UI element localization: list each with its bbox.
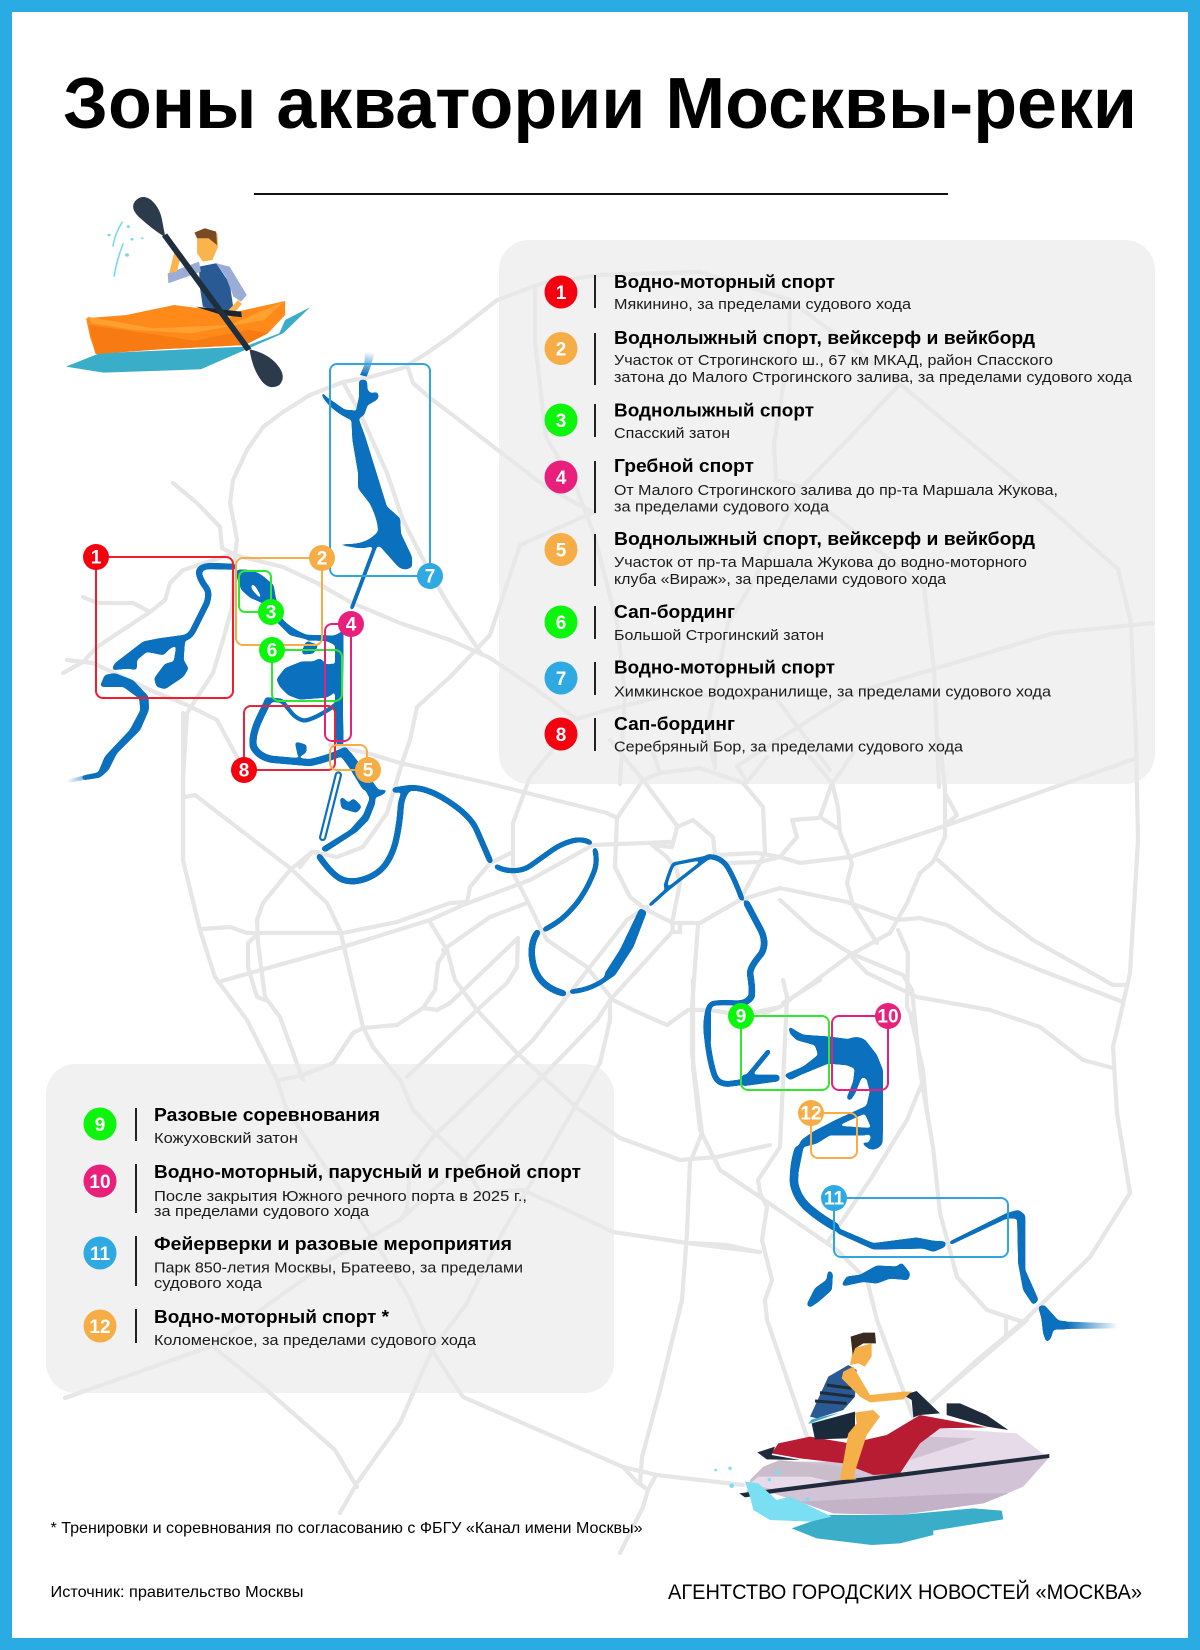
legend item 7: Химкинское водохранилище, за пределами судового хода xyxy=(614,684,1052,700)
legend item 2: затона до Малого Строгинского залива, за пределами судового хода xyxy=(614,369,1133,386)
southern lakes xyxy=(807,1270,833,1307)
bay fragment xyxy=(302,642,318,654)
map badges: 12 xyxy=(800,1104,822,1124)
map badges: 1 xyxy=(91,548,102,568)
river: tail fades xyxy=(67,352,1118,1329)
Serebryany Bor channels xyxy=(253,701,345,763)
legend item 8: Серебряный Бор, за пределами судового хода xyxy=(614,738,964,756)
legend item 4: От Малого Строгинского залива до пр-та Маршала Жукова, xyxy=(614,482,1058,499)
legend item 2: 2 xyxy=(556,340,566,360)
legend item 6: 6 xyxy=(556,613,566,634)
legend item 12: 12 xyxy=(89,1317,111,1338)
legend item 6 xyxy=(544,602,824,644)
legend item 2 xyxy=(544,328,1133,386)
map badges: 5 xyxy=(363,760,374,782)
legend item 4: за пределами судового хода xyxy=(614,498,830,516)
legend item 7: 7 xyxy=(556,669,566,690)
main channel segments xyxy=(395,788,490,861)
title: Зоны акватории Москвы-реки xyxy=(63,64,1137,144)
legend item 1: Водно-моторный спорт xyxy=(614,272,835,292)
legend item 3: Спасский затон xyxy=(614,425,730,442)
legend item 2: Воднолыжный спорт, вейксерф и вейкборд xyxy=(614,328,1036,348)
Khimki reservoir xyxy=(322,380,412,569)
legend item 5: Воднолыжный спорт, вейксерф и вейкборд xyxy=(614,529,1036,549)
canal xyxy=(352,547,375,608)
legend item 2: Участок от Строгинского ш., 67 км МКАД, район Спасского xyxy=(614,352,1053,369)
Spasskiy backwater xyxy=(237,570,340,642)
legend item 11 xyxy=(84,1234,523,1292)
map badges: 8 xyxy=(239,760,249,782)
legend item 7: Водно-моторный спорт xyxy=(614,658,835,678)
legend item 10: После закрытия Южного речного порта в 2025 г., xyxy=(154,1188,527,1205)
map badges: 2 xyxy=(317,548,327,570)
Kolomenskoye arm xyxy=(793,1106,872,1180)
isolated rowing canal xyxy=(323,775,338,837)
legend item 10 xyxy=(84,1162,581,1220)
map badges: 6 xyxy=(267,640,277,662)
legend item 11: Фейерверки и разовые мероприятия xyxy=(154,1234,512,1254)
legend item 8 xyxy=(544,714,964,756)
legend: zones 9–12 xyxy=(84,1105,581,1349)
map badges: 9 xyxy=(736,1006,746,1028)
map badges: 4 xyxy=(346,614,357,636)
Myakinino lower channel xyxy=(82,673,149,780)
canal to Serebryany Bor xyxy=(325,630,343,745)
main bend below zone 5 xyxy=(321,752,388,852)
legend item 5: Участок от пр-та Маршала Жукова до водно-моторного xyxy=(614,554,1027,571)
legend item 1 xyxy=(544,272,912,313)
legend item 12: Водно-моторный спорт * xyxy=(154,1307,389,1327)
legend item 9 xyxy=(84,1105,380,1147)
panel background: zones 1–8 xyxy=(499,240,1155,784)
Southern port basin xyxy=(784,1026,883,1149)
pond xyxy=(340,797,362,813)
legend item 11: 11 xyxy=(90,1244,110,1265)
legend item 11: Парк 850-летия Москвы, Братеево, за пределами xyxy=(154,1260,523,1276)
road network xyxy=(63,272,1153,1553)
panel background: zones 9–12 xyxy=(46,1064,614,1393)
source: Источник: правительство Москвы xyxy=(50,1584,304,1601)
legend item 7 xyxy=(544,658,1052,700)
legend item 11: судового хода xyxy=(154,1275,263,1292)
Kozhukhovo channel xyxy=(706,1010,745,1084)
title rule xyxy=(254,193,948,195)
legend item 8: Сап-бординг xyxy=(614,714,736,734)
legend item 8: 8 xyxy=(556,725,566,746)
legend item 4 xyxy=(544,456,1058,516)
river below zone 5 xyxy=(337,750,370,790)
Krylatskoye loop xyxy=(319,788,408,881)
legend item 10: за пределами судового хода xyxy=(154,1203,370,1220)
legend item 5: 5 xyxy=(556,540,567,562)
footnote: * Тренировки и соревнования по согласованию с ФБГУ «Канал имени Москвы» xyxy=(50,1520,643,1537)
legend item 12: Коломенское, за пределами судового хода xyxy=(154,1332,477,1349)
legend item 3: 3 xyxy=(556,411,566,432)
map badges: 11 xyxy=(824,1188,844,1210)
legend item 1: 1 xyxy=(556,283,567,304)
map badges: 3 xyxy=(266,602,276,624)
agency credit: АГЕНТСТВО ГОРОДСКИХ НОВОСТЕЙ «МОСКВА» xyxy=(668,1580,1142,1604)
illustration: kayaker xyxy=(66,197,310,387)
legend item 1: Мякинино, за пределами судового хода xyxy=(614,296,912,313)
legend item 10: Водно-моторный, парусный и гребной спорт xyxy=(154,1162,581,1182)
river: Moskva course xyxy=(82,380,1068,1342)
legend item 12 xyxy=(84,1307,477,1349)
legend item 9: Кожуховский затон xyxy=(154,1130,298,1147)
legend item 3 xyxy=(544,400,814,442)
legend item 3: Воднолыжный спорт xyxy=(614,400,814,420)
legend: zones 1–8 xyxy=(544,272,1133,756)
legend item 4: Гребной спорт xyxy=(614,456,754,476)
legend item 6: Сап-бординг xyxy=(614,602,736,622)
legend item 9: Разовые соревнования xyxy=(154,1105,380,1125)
Myakinino upper channel xyxy=(185,566,233,638)
Kozhukhovo branch xyxy=(745,1052,768,1080)
legend item 5 xyxy=(544,529,1036,588)
legend item 6: Большой Строгинский затон xyxy=(614,627,824,644)
Stroginsky lake xyxy=(277,658,334,699)
Myakinino bay xyxy=(112,635,190,689)
legend item 9: 9 xyxy=(95,1115,105,1136)
legend item 10: 10 xyxy=(89,1172,111,1193)
legend item 5: клуба «Вираж», за пределами судового хода xyxy=(614,571,947,588)
map badges xyxy=(83,544,901,1211)
Moskva lower bend xyxy=(794,1150,835,1227)
map badges: 7 xyxy=(425,566,435,588)
illustration: jet ski rider xyxy=(714,1333,1049,1545)
legend item 4: 4 xyxy=(556,468,567,489)
map badges: 10 xyxy=(877,1006,899,1028)
zone outlines xyxy=(96,364,1008,1257)
